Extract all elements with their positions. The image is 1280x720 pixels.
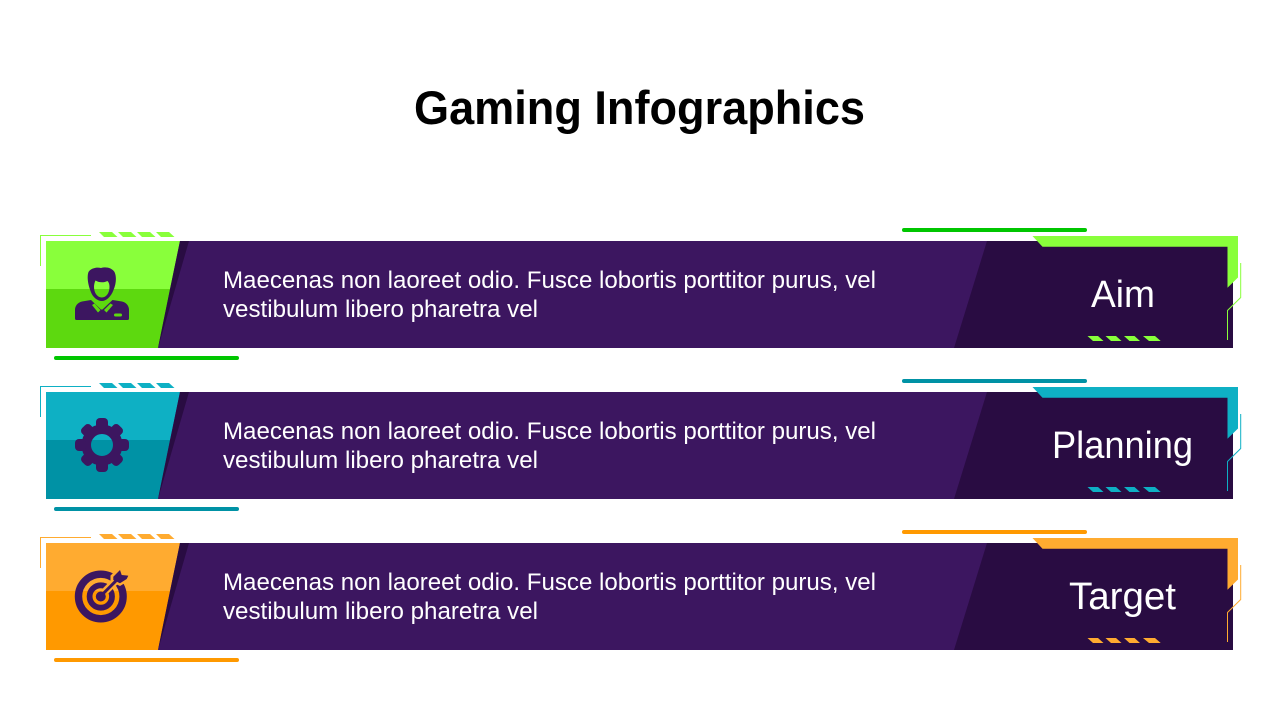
body text: vestibulum libero pharetra vel <box>223 296 538 323</box>
label dashes <box>1088 336 1161 341</box>
top-right accent bar <box>902 379 1087 383</box>
bottom-left accent bar <box>54 507 239 511</box>
body text: vestibulum libero pharetra vel <box>223 447 538 474</box>
body text: vestibulum libero pharetra vel <box>223 598 538 625</box>
top-right accent bar <box>902 530 1087 534</box>
panel: Planning <box>40 379 1241 511</box>
tile dark wedge <box>158 241 189 348</box>
label: Aim: Aim <box>1091 274 1155 316</box>
right thin outline <box>1228 565 1241 642</box>
icon: person collar marks <box>92 304 122 316</box>
tile dark wedge <box>158 543 189 650</box>
bottom-left accent bar <box>54 356 239 360</box>
icon tile: orange <box>46 543 180 650</box>
title: Gaming Infographics <box>414 81 865 134</box>
main purple bar <box>158 392 1233 499</box>
top-left dashes <box>99 383 174 388</box>
right corner frame <box>1032 236 1238 288</box>
top-left thin corner <box>40 236 91 266</box>
top-left dashes <box>99 534 174 539</box>
right thin outline <box>1228 263 1241 340</box>
right dark label panel <box>954 241 1233 348</box>
label dashes <box>1088 487 1161 492</box>
right dark label panel <box>954 392 1233 499</box>
label dashes <box>1088 638 1161 643</box>
icon: person <box>75 267 129 320</box>
icon: target with arrow <box>78 567 131 619</box>
panel: Target <box>40 530 1241 662</box>
bottom-left accent bar <box>54 658 239 662</box>
top-left thin corner <box>40 386 91 417</box>
body text: Maecenas non laoreet odio. Fusce lobortis porttitor purus, vel <box>223 569 876 596</box>
top-left thin corner <box>40 538 91 568</box>
panel: Aim <box>40 228 1241 360</box>
body text <box>223 267 876 323</box>
right corner frame <box>1032 387 1238 439</box>
right corner frame <box>1032 538 1238 590</box>
top-right accent bar <box>902 228 1087 232</box>
body text: Maecenas non laoreet odio. Fusce lobortis porttitor purus, vel <box>223 267 876 294</box>
body text <box>223 569 876 625</box>
icon tile: teal <box>46 392 180 499</box>
top-left dashes <box>99 232 174 237</box>
label: Planning: Planning <box>1052 425 1193 467</box>
icon: gear <box>75 418 129 472</box>
body text <box>223 418 876 474</box>
icon tile: green <box>46 241 180 348</box>
main purple bar <box>158 543 1233 650</box>
right thin outline <box>1228 414 1241 491</box>
tile dark wedge <box>158 392 189 499</box>
right dark label panel <box>954 543 1233 650</box>
label: Target: Target <box>1069 576 1176 618</box>
body text: Maecenas non laoreet odio. Fusce lobortis porttitor purus, vel <box>223 418 876 445</box>
main purple bar <box>158 241 1233 348</box>
